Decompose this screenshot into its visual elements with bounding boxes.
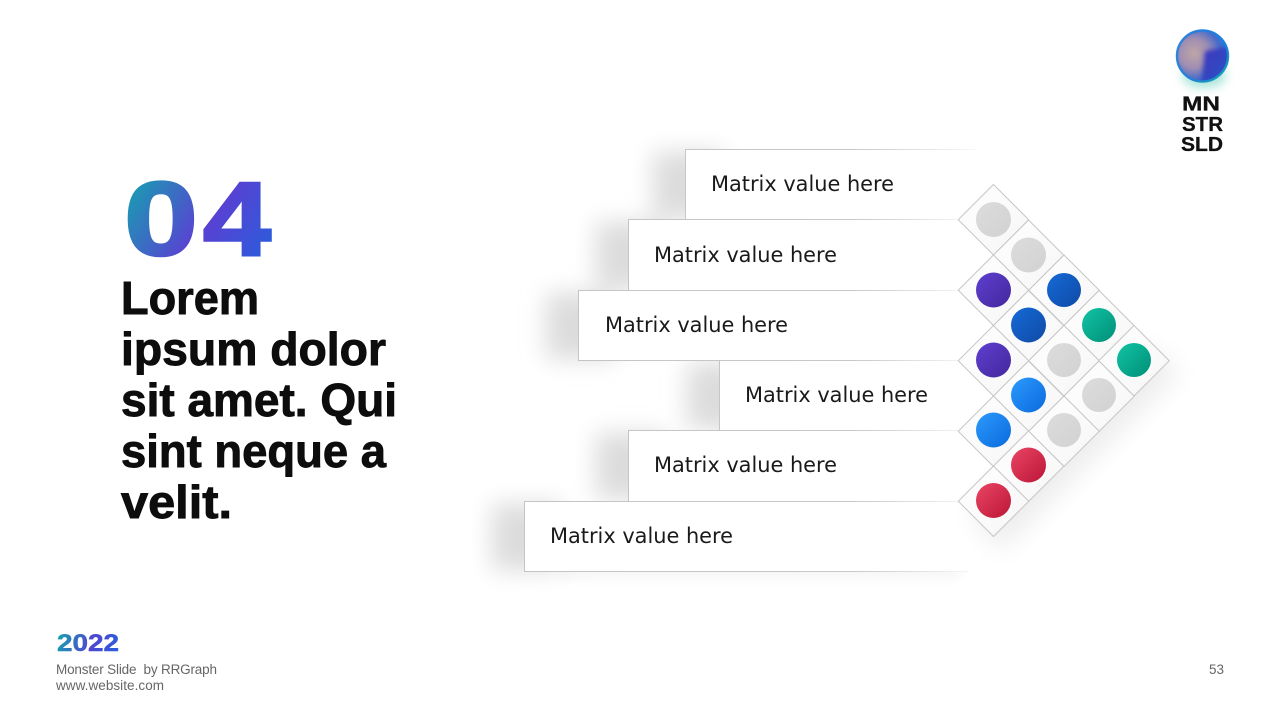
heading: ipsum dolor (121, 323, 386, 375)
logo (1176, 30, 1232, 156)
section number 04: 0 (124, 161, 198, 278)
box shadows (492, 152, 757, 570)
heading: sint neque a (121, 425, 386, 477)
row 2 (628, 220, 968, 290)
cell: blue 2 (958, 396, 1029, 466)
row 1: Matrix value here (711, 172, 894, 196)
section number 04 (124, 161, 271, 278)
cell: light gray 1 (958, 184, 1029, 255)
cell: navy 2 (993, 290, 1064, 361)
footer credits (55, 662, 217, 693)
row 6: Matrix value here (550, 524, 733, 548)
cell: purple 2 (958, 326, 1029, 396)
cell: blue 1 (993, 361, 1064, 432)
cell: red 2 (958, 466, 1029, 536)
cell: red 1 (993, 431, 1064, 502)
row 6 (524, 502, 968, 572)
heading (121, 272, 397, 528)
cell: light gray 3 (1029, 326, 1099, 396)
row 5 (628, 430, 968, 502)
matrix drop shadow (970, 345, 1182, 552)
cell: light gray 5 (1029, 396, 1099, 466)
logo wordmark: STR (1182, 114, 1224, 136)
heading: sit amet. Qui (121, 374, 397, 426)
page number: 53 (1209, 662, 1224, 677)
cell: navy 1 (1029, 255, 1099, 326)
logo wordmark: SLD (1181, 134, 1223, 156)
cell: light gray 4 (1064, 361, 1134, 432)
logo wordmark (1181, 94, 1224, 156)
row 1 (686, 150, 976, 220)
faint shadow under last row (560, 564, 960, 576)
heading: Lorem (121, 272, 259, 324)
section number 04: 4 (203, 161, 271, 278)
row 3: Matrix value here (605, 313, 788, 337)
cell: purple 1 (958, 255, 1029, 326)
logo wordmark: MN (1182, 94, 1220, 116)
footer credits: Monster Slide by RRGraph (56, 662, 217, 677)
row 3 (578, 290, 968, 360)
row 5: Matrix value here (654, 453, 837, 477)
heading: velit. (121, 476, 232, 528)
footer credits: www.website.com (55, 678, 164, 693)
matrix value rows (524, 150, 976, 572)
row 2: Matrix value here (654, 243, 837, 267)
icon: logo orb (1176, 30, 1232, 88)
footer year: 2022 (57, 630, 119, 657)
cell: teal 2 (1099, 326, 1169, 396)
row 4 (720, 360, 970, 430)
cell: light gray 2 (993, 220, 1064, 290)
cell: teal 1 (1064, 290, 1134, 361)
diamond matrix (958, 184, 1182, 552)
row 4: Matrix value here (745, 383, 928, 407)
